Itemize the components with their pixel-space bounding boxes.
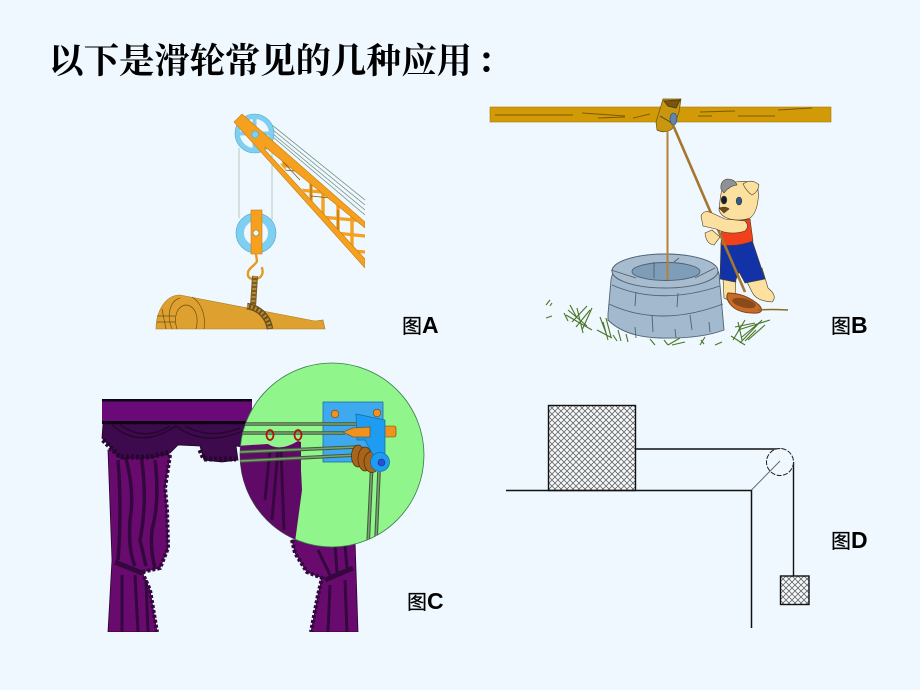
axle <box>370 452 390 472</box>
label: figure B: 图B <box>831 312 868 338</box>
pulley <box>766 448 794 476</box>
curtain rings <box>266 430 302 440</box>
orange screws <box>331 409 396 437</box>
string over pulley <box>636 449 794 576</box>
label: figure C: 图C <box>407 588 444 614</box>
rope coil <box>727 293 788 313</box>
brown pulley wheels <box>352 445 380 472</box>
panel: figure C curtain pulley <box>102 363 424 632</box>
blue mounting plate <box>323 402 383 462</box>
curtain rail <box>102 399 252 424</box>
lower pulley wheel and strap <box>236 210 276 254</box>
panel: figure D pulley diagram <box>506 406 809 628</box>
title: ： <box>477 42 512 81</box>
lifting rope <box>253 276 255 307</box>
crane boom lattice <box>234 114 365 270</box>
pull rope <box>673 125 745 292</box>
beam pulley bracket <box>656 99 681 132</box>
well rope <box>666 130 668 280</box>
magnifier circle <box>235 363 424 550</box>
large hatched block <box>548 406 636 490</box>
grass tufts <box>546 300 770 345</box>
curtain valance <box>102 424 250 462</box>
panel: figure A crane pulley <box>156 114 365 329</box>
label: figure A: 图A <box>402 312 439 338</box>
small hatched block <box>780 576 809 604</box>
panel: figure B well pulley <box>490 99 831 345</box>
upper pulley wheel <box>235 114 274 153</box>
blue bracket <box>356 414 386 456</box>
crane cables <box>239 125 365 220</box>
orange cord guide <box>343 427 370 437</box>
log <box>156 295 325 329</box>
left curtain <box>108 450 170 632</box>
hook <box>248 254 263 279</box>
wooden beam <box>490 107 831 122</box>
bear arm and hand <box>701 212 748 233</box>
label: figure D: 图D <box>831 527 868 553</box>
curtain in magnifier <box>240 441 302 540</box>
pulley support <box>752 461 780 490</box>
cords <box>240 424 379 545</box>
title: 以下是滑轮常见的几种应用 <box>48 42 472 81</box>
table surface and edge <box>506 490 752 628</box>
bear character <box>705 179 774 302</box>
right curtain <box>292 540 358 632</box>
stone well <box>608 254 724 338</box>
